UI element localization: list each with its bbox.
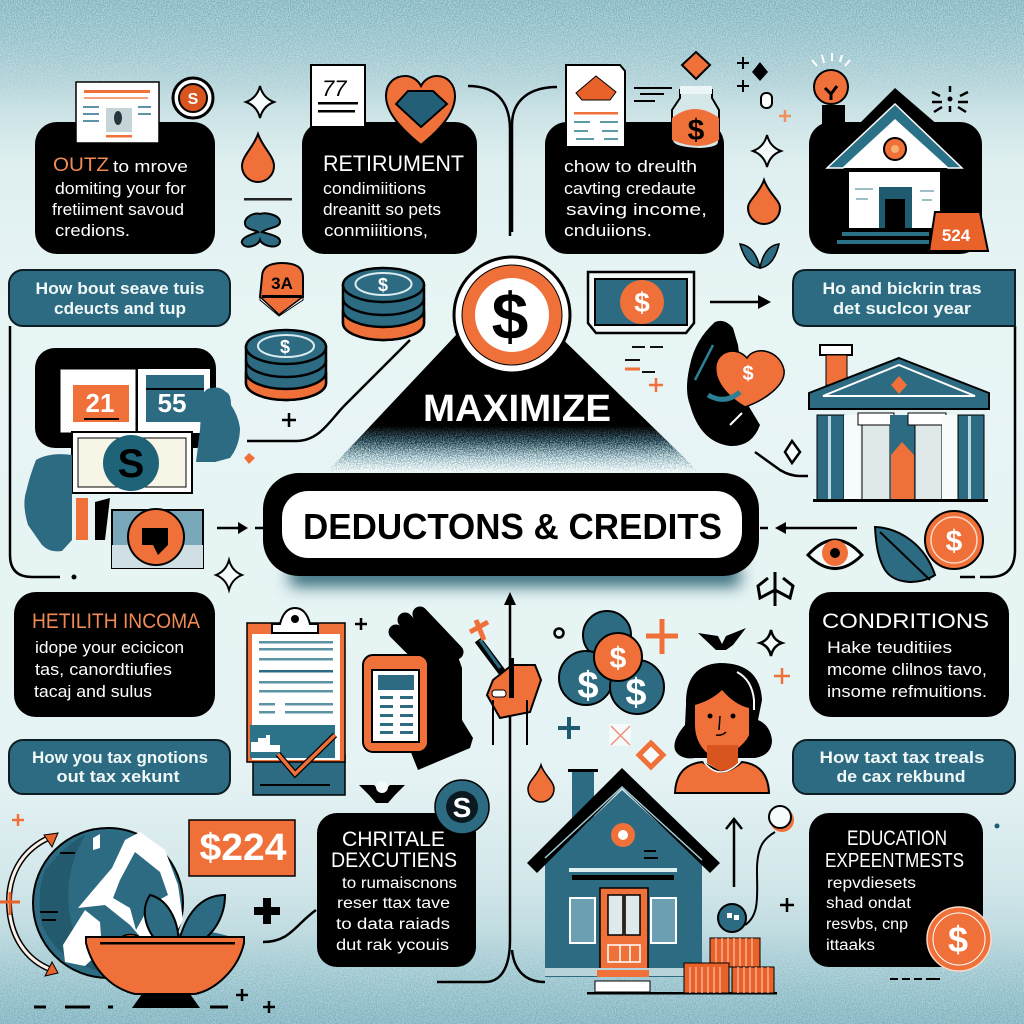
icon: top sparkles <box>634 52 968 268</box>
banner: lower right: de cax rekbund <box>836 767 966 786</box>
panel: contributions: Hake teuditiies <box>827 638 952 657</box>
icon: coin stack lower: $ <box>280 337 290 357</box>
icon: document: 77 <box>322 76 347 101</box>
icon: dashes and plus <box>625 347 663 392</box>
icon: orange plus small <box>12 814 24 826</box>
icon: plus small <box>355 618 367 630</box>
icon: wing ornament left <box>359 781 405 803</box>
icon: money jar: $ <box>688 114 705 147</box>
panel: contributions: CONDRITIONS <box>822 610 989 633</box>
panel: charitable deductions: dut rak ycouis <box>336 937 449 954</box>
bill: 55 <box>138 369 210 433</box>
icon: document <box>311 65 365 127</box>
panel: education expenses: EXPEENTMESTS <box>825 850 964 872</box>
panel: charitable deductions: to data raiads <box>336 916 450 933</box>
text block: to mrove <box>113 157 188 176</box>
panel: education expenses: repvdiesets <box>827 875 916 892</box>
icon: orange price box <box>189 820 295 876</box>
arrow: into banner from right <box>760 522 857 534</box>
text block: condimiitions <box>323 179 426 198</box>
panel: bills and hands <box>24 348 240 568</box>
text block: cnduiions. <box>564 221 652 240</box>
bill: dollar: S <box>118 442 144 486</box>
icon: coin cluster: $ <box>610 642 627 675</box>
banner: top left: How bout seave tuis <box>36 279 204 298</box>
icon: plus <box>282 413 296 427</box>
icon: small drop <box>528 765 554 802</box>
icon: black plus <box>254 898 280 924</box>
icon: document <box>566 65 625 147</box>
text block: OUTZ <box>53 155 109 176</box>
panel: health income: tas, canordtiufies <box>35 660 172 679</box>
panel: education expenses: ittaaks <box>826 937 875 954</box>
icon: coin stack upper <box>343 268 424 340</box>
icon: clipboard <box>247 608 345 795</box>
icon: 3A badge <box>260 263 303 316</box>
text block: domiting your for <box>55 179 186 198</box>
icon: central dollar coin <box>454 257 570 373</box>
banner: top left <box>9 270 230 326</box>
icon: coin stack upper: $ <box>378 275 388 295</box>
icon: 3A badge: 3A <box>271 274 293 293</box>
icon: coin stack lower <box>246 330 326 400</box>
panel: education expenses: shad ondat <box>826 895 912 912</box>
panel: house <box>809 53 988 254</box>
banner: top right: det suclcoı year <box>833 299 971 318</box>
icon: coin cluster: $ <box>577 665 599 707</box>
panel: contributions <box>809 592 1009 717</box>
icon: orange dollar coin <box>927 907 991 971</box>
icon: hand holding heart: $ <box>742 363 754 385</box>
icon: hand holding pen <box>470 592 541 745</box>
icon: bottom left dashes <box>34 989 275 1013</box>
icon: money jar <box>672 86 719 149</box>
heading: DEDUCTONS & CREDITS <box>303 506 722 547</box>
text block <box>564 157 707 240</box>
text block: saving income, <box>566 200 707 219</box>
icon: woman <box>674 663 772 793</box>
panel: retirement <box>302 65 477 254</box>
icon: small orange diamond <box>244 453 255 464</box>
icon: heart <box>386 76 455 145</box>
icon: teal dollar badge: S <box>453 792 471 823</box>
icon: leaf and coin <box>875 511 983 582</box>
banner: lower left: How you tax gnotions <box>32 748 208 767</box>
arrow: to right banner <box>710 295 771 309</box>
banner: top left: cdeucts and tup <box>54 299 186 318</box>
icon: eye <box>808 540 862 568</box>
icon: leaf and coin: $ <box>946 525 963 558</box>
text block: fretiiment savoud <box>52 200 184 219</box>
banner: lower right <box>793 740 1015 794</box>
panel: saving income <box>545 65 724 254</box>
icon: circular arrow <box>0 833 58 976</box>
icon: teal bubble and connector <box>718 806 794 932</box>
panel: health income <box>14 592 215 717</box>
panel: charitable deductions: DEXCUTIENS <box>331 849 457 872</box>
arrow: into banner from left <box>217 522 263 534</box>
icon: right hand <box>196 388 240 462</box>
icon: hand holding heart <box>687 321 784 446</box>
icon: coin cluster <box>559 611 664 714</box>
panel: charitable deductions <box>317 813 476 967</box>
icon: coin badge <box>173 78 213 118</box>
text block: chow to dreulth <box>564 157 697 176</box>
icon: left hand <box>24 454 72 551</box>
icon: house <box>818 88 975 244</box>
icon: orange dollar coin: $ <box>948 919 968 960</box>
panel: contributions: mcome clilnos tavo, <box>827 660 987 679</box>
text block <box>52 155 188 240</box>
banner: top right: Ho and bickrin tras <box>822 279 982 298</box>
banner shadow <box>290 566 740 586</box>
panel: tax deduction tips (top left) <box>35 78 215 254</box>
icon: dot <box>72 574 76 580</box>
banner: deductions and credits <box>263 473 759 576</box>
panel: education expenses: EDUCATION <box>847 827 947 850</box>
text block: dreanitt so pets <box>323 200 441 219</box>
panel: health income: tacaj and sulus <box>34 682 152 701</box>
icon: bank note <box>588 272 694 333</box>
icon: globe <box>33 828 183 978</box>
bill: 55: 55 <box>158 388 186 418</box>
bill: dollar <box>72 432 192 493</box>
triangle: maximize <box>327 335 699 472</box>
icon: plus and dot <box>780 824 1000 979</box>
icon: small markers <box>554 619 790 767</box>
banner: lower left <box>9 740 230 794</box>
icon: bank building <box>809 345 989 502</box>
icon: coin cluster: $ <box>625 672 647 714</box>
icon: bowl with leaves <box>86 895 245 1008</box>
bill: 21 <box>60 369 136 433</box>
text block: RETIRUMENT <box>323 151 464 176</box>
icon: price tag: 524 <box>942 226 971 245</box>
banner: lower left: out tax xekunt <box>56 767 180 786</box>
icon: diamond <box>785 441 800 463</box>
panel: charitable deductions: to rumaiscnons <box>342 875 457 892</box>
icon: stacked boxes <box>684 938 774 993</box>
bill: bottom accent <box>76 498 203 568</box>
panel: education expenses <box>809 813 983 967</box>
arrow: up <box>726 819 742 887</box>
icon: bank note: $ <box>634 287 650 318</box>
icon: sparkle <box>216 560 242 590</box>
title: maximize: MAXIMIZE <box>423 388 611 430</box>
panel: contributions: insome refmuitions. <box>827 682 987 701</box>
icon: teal dollar badge <box>435 780 489 834</box>
text block: cavting credaute <box>564 179 696 198</box>
bill: 21: 21 <box>86 388 114 418</box>
icon: orange price box: $224 <box>200 827 286 869</box>
text block <box>323 151 464 240</box>
panel: health income: idope your ecicicon <box>35 638 184 657</box>
panel: education expenses: resvbs, cnp <box>826 916 908 933</box>
icon: left side sparkle and drop <box>242 86 292 247</box>
icon: coin badge: S <box>188 91 199 108</box>
icon: hand with calculator <box>363 614 473 770</box>
panel: health income: HETILITH INCOMA <box>32 610 200 633</box>
text block: credions. <box>55 221 130 240</box>
panel: charitable deductions: CHRITALE <box>342 828 445 851</box>
icon: right dashes <box>960 576 990 578</box>
banner: top right <box>793 270 1015 326</box>
icon: light bulb <box>812 53 850 127</box>
icon: price tag <box>929 212 988 251</box>
banner: lower right: How taxt tax treals <box>820 748 984 767</box>
icon: central dollar coin: $ <box>492 279 528 353</box>
icon: trident ornament <box>758 572 793 606</box>
icon: document <box>76 82 159 143</box>
icon: house bottom <box>527 768 777 994</box>
text block: conmiiitions, <box>324 221 428 240</box>
panel: charitable deductions: reser ttax tave <box>337 895 450 912</box>
